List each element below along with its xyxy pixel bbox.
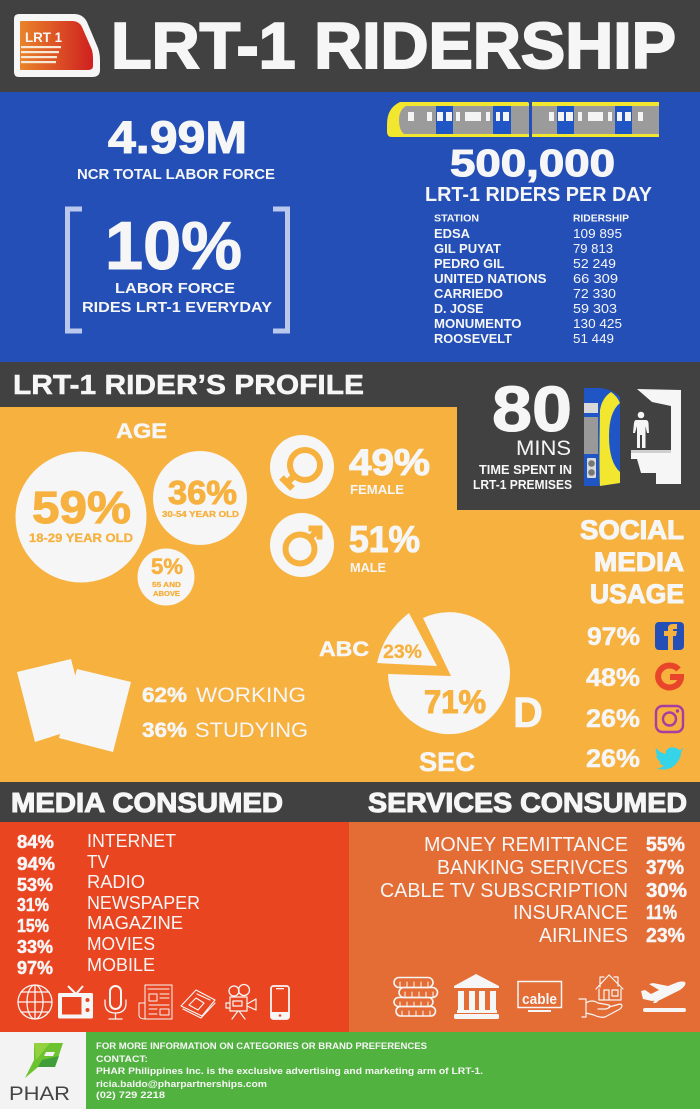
bubble: 55 and above: 5% (151, 554, 183, 579)
bubble: 30-54: 36% (168, 474, 237, 511)
bubble: 55 and above: ABOVE (153, 589, 180, 598)
panel: rider's profile (0, 362, 700, 782)
stat: occupation: WORKING (196, 684, 306, 707)
list: media percentages: MOVIES (87, 934, 155, 954)
panel: header (0, 0, 700, 92)
table: station ridership: EDSA (434, 227, 470, 241)
chart: SEC pie: D (513, 689, 543, 737)
table: station ridership: RIDERSHIP (573, 214, 629, 224)
stat: occupation: 36% (142, 719, 187, 742)
panel: media consumed (0, 782, 700, 1032)
table: station ridership: PEDRO GIL (434, 257, 505, 271)
stat: total labor force (77, 112, 275, 183)
list: service percentages: 11% (646, 902, 677, 924)
row: facebook: 97% (587, 623, 640, 651)
list: media percentages: RADIO (87, 872, 145, 892)
stat: ten percent in brackets: 10% (105, 208, 242, 284)
row: google (586, 664, 681, 692)
stat: riders per day (425, 143, 653, 206)
list: media percentages: MAGAZINE (87, 913, 183, 933)
list: service percentages: AIRLINES (539, 925, 628, 947)
icon: movie camera (226, 984, 256, 1019)
stat: ten percent in brackets: RIDES LRT-1 EVERYDAY (82, 299, 272, 316)
table: station ridership: 59 303 (573, 302, 617, 316)
bubble: 18-29: 59% (32, 482, 131, 533)
stat: female: FEMALE (350, 483, 404, 497)
table: station ridership: CARRIEDO (434, 287, 503, 301)
stat: male: MALE (350, 561, 386, 575)
list: media percentages: NEWSPAPER (87, 893, 200, 913)
icon: LRT-1 logo (14, 14, 100, 77)
table: station ridership: D. JOSE (434, 302, 484, 316)
list: service percentages: 55% (646, 834, 685, 856)
icon: male (270, 513, 334, 577)
row: instagram: 26% (586, 705, 640, 733)
table: station ridership: 72 330 (573, 287, 616, 301)
panel: footer (0, 1032, 700, 1109)
bubble: 30-54 (153, 451, 247, 545)
table: station ridership: STATION (434, 214, 479, 224)
panel: time spent: TIME SPENT IN (479, 463, 572, 477)
logo: PHAR (9, 1043, 70, 1105)
icon: train (387, 102, 659, 137)
stat: female: 49% (349, 442, 430, 483)
icon: newspaper (139, 985, 172, 1019)
title: LRT-1 RIDERSHIP (111, 9, 676, 82)
list: media percentages: TV (87, 852, 109, 872)
text: contact details: FOR MORE INFORMATION ON CATEGORIES OR BRAND PREFERENCES (96, 1041, 427, 1051)
table: station ridership: 130 425 (573, 317, 622, 331)
table: station ridership: ROOSEVELT (434, 332, 512, 346)
panel: time spent: LRT-1 PREMISES (473, 478, 572, 492)
list: media percentages: 84% (17, 832, 54, 852)
list: media percentages: 53% (17, 875, 53, 895)
icon: globe (18, 985, 52, 1019)
icon: LRT-1 logo: LRT 1 (25, 29, 62, 45)
bubble: 55 and above (138, 548, 194, 606)
row: instagram (586, 705, 683, 733)
row: twitter (586, 745, 684, 773)
logo: PHAR: PHAR (9, 1084, 70, 1105)
table: station ridership (434, 214, 629, 346)
heading: services consumed: SERVICES CONSUMED (368, 787, 687, 818)
list: media percentages: 15% (17, 916, 49, 936)
bubble: 18-29 (16, 452, 146, 582)
stat: riders per day: 500,000 (450, 143, 615, 185)
icon: train front (584, 388, 620, 486)
panel: services consumed (349, 787, 700, 1032)
chart: SEC pie: ABC (319, 638, 369, 661)
chart: SEC pie (319, 612, 543, 777)
list: media percentages (17, 831, 200, 978)
panel: time spent: MINS (516, 437, 571, 460)
table: station ridership: 52 249 (573, 257, 616, 271)
bubble: 55 and above: 55 AND (152, 580, 182, 589)
stat: total labor force: 4.99M (108, 112, 247, 163)
list: media percentages: MOBILE (87, 955, 155, 975)
row: facebook (587, 622, 684, 651)
stat: ten percent in brackets (68, 208, 288, 331)
icon: female (270, 435, 334, 499)
icon: smartphone (271, 986, 289, 1019)
heading: age: AGE (116, 420, 167, 443)
icon: coins (394, 978, 438, 1016)
list: service percentages: 37% (646, 857, 684, 879)
stat: occupation: 62% (142, 684, 187, 707)
stat: female (349, 442, 430, 497)
icon: microphone (105, 986, 126, 1019)
table: station ridership: MONUMENTO (434, 317, 522, 331)
heading: media consumed: MEDIA CONSUMED (11, 787, 283, 818)
heading: social media usage: USAGE (590, 579, 684, 609)
icon: cable tv (518, 982, 562, 1012)
list: media percentages: 33% (17, 937, 53, 957)
bubble: 18-29: 18-29 YEAR OLD (29, 533, 133, 545)
list: service percentages: 23% (646, 925, 685, 947)
chart: SEC pie: SEC (419, 747, 475, 777)
stat: ten percent in brackets: LABOR FORCE (115, 280, 235, 297)
icon: cable tv: cable (522, 992, 557, 1008)
table: station ridership: 66 309 (573, 272, 618, 286)
icon: television (58, 986, 93, 1018)
list: service percentages: MONEY REMITTANCE (424, 834, 628, 856)
chart: SEC pie: 71% (424, 684, 486, 720)
stat: male: 51% (349, 519, 420, 560)
row: google: 48% (586, 664, 640, 692)
icon: bank (454, 974, 499, 1019)
list: media percentages: INTERNET (87, 831, 176, 851)
list: service percentages: INSURANCE (513, 902, 628, 924)
list: media percentages: 31% (17, 895, 49, 915)
icon: magazine (181, 990, 215, 1018)
stat: riders per day: LRT-1 RIDERS PER DAY (425, 184, 653, 206)
table: station ridership: 51 449 (573, 332, 614, 346)
table: station ridership: 79 813 (573, 242, 613, 256)
list: media percentages: 97% (17, 958, 53, 978)
list: service percentages: CABLE TV SUBSCRIPTION (380, 880, 628, 902)
heading: social media usage: SOCIAL (580, 515, 684, 545)
table: station ridership: 109 895 (573, 227, 622, 241)
list: service percentages: 30% (646, 880, 687, 902)
row: twitter: 26% (586, 745, 640, 773)
panel: time spent: 80 (492, 373, 572, 445)
panel: labor force and daily riders (0, 92, 700, 362)
icon: insurance hand and house (579, 975, 623, 1017)
list: media percentages: 94% (17, 854, 55, 874)
text: contact details: PHAR Philippines Inc. is the exclusive advertising and marketing arm of LRT-1. (96, 1066, 483, 1076)
icon: airplane (641, 982, 686, 1012)
stat: total labor force: NCR TOTAL LABOR FORCE (77, 167, 275, 183)
stat: occupation: STUDYING (195, 719, 308, 742)
chart: SEC pie: 23% (383, 642, 422, 663)
list: service percentages (380, 834, 687, 947)
text: contact details: ricia.baldo@pharpartnerships.com (96, 1079, 267, 1089)
icon: station platform with person (631, 389, 681, 484)
table: station ridership: GIL PUYAT (434, 242, 501, 256)
bubble: 30-54: 30-54 YEAR OLD (162, 510, 239, 519)
list: service percentages: BANKING SERIVCES (437, 857, 628, 879)
heading: rider's profile: LRT-1 RIDER’S PROFILE (13, 369, 364, 400)
text: contact details: (02) 729 2218 (96, 1090, 165, 1100)
table: station ridership: UNITED NATIONS (434, 272, 546, 286)
icon: documents (17, 659, 131, 752)
heading: social media usage: MEDIA (594, 547, 684, 577)
text: contact details (96, 1041, 483, 1100)
stat: occupation (142, 684, 308, 742)
heading: social media usage (580, 515, 684, 609)
text: contact details: CONTACT: (96, 1054, 148, 1064)
panel: time spent (457, 362, 700, 510)
